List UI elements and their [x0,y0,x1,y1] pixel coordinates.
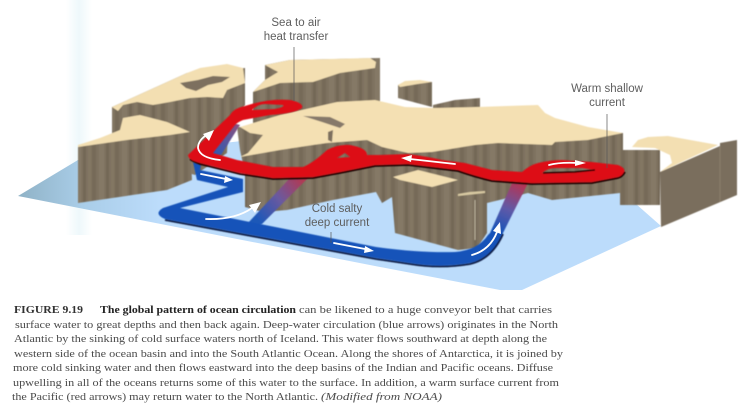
arrow: Pacific upwelling [472,222,501,255]
ocean floor [18,140,661,290]
label: sea to air heat transfer: Sea to air [271,17,321,29]
continents [78,58,737,250]
arrow: Antarctic upwelling [206,202,261,219]
caption: western side of the ocean basin and into the South Atlantic Ocean. Along the shores of Antarctica, it is joined by [14,349,564,360]
loop hole shading [543,170,595,173]
Eurasia and Africa top surface [240,100,623,157]
label: warm shallow current: Warm shallow [571,83,644,95]
white flow arrows [198,130,586,255]
rising limb in Pacific [490,183,528,233]
deep blue current [158,122,528,266]
right end block [660,140,737,227]
caption: upwelling in all of the oceans returns some of this water to the surface. In addition, a warm surface current from [13,378,559,389]
North America block [112,64,245,175]
India and Southeast Asia island [393,170,485,240]
blue band [158,162,503,266]
arrow: Pacific surface loop [549,160,586,166]
red band shadow edge [190,159,625,184]
label: cold salty deep current: Cold salty [312,203,362,215]
caption: surface water to great depths and then back again. Deep-water circulation (blue arrows) originates in the North [15,320,559,331]
page tint [66,0,92,235]
arrow: eastward deep [334,243,374,253]
label: warm shallow current: current [589,97,626,109]
arrow: North Atlantic deep [201,174,233,183]
warm red current [188,100,625,184]
label: cold salty deep current [305,203,370,243]
Australia block [620,136,718,205]
Northern Eurasia block [253,58,380,125]
main land block wall [237,125,623,250]
rising limb near Greenland [210,122,240,155]
caption: The global pattern of ocean circulation [100,305,296,316]
label: cold salty deep current: deep current [305,217,370,229]
caption: can be likened to a huge conveyor belt that carries [299,305,552,316]
label: warm shallow current [571,83,644,168]
caption: (Modified from NOAA) [321,392,443,403]
caption: Atlantic by the sinking of cold surface waters north of Iceland. This water flows southward at depth along the [14,334,547,345]
South America block [78,115,192,203]
arrow: Atlantic surface north [198,130,220,160]
label: sea to air heat transfer [264,17,328,101]
caption: FIGURE 9.19 [14,305,83,316]
caption: the Pacific (red arrows) may return water to the North Atlantic. [12,392,318,403]
rising limb through Africa [247,178,308,224]
caption: more cold sinking water and then flows eastward into the deep basins of the Indian and Pacific oceans. Diffuse [13,363,553,374]
arrow: westward surface [401,155,455,164]
band shadow edge [165,220,503,266]
caption [12,305,564,403]
small northern islands [398,80,480,110]
label: sea to air heat transfer: heat transfer [264,31,328,43]
